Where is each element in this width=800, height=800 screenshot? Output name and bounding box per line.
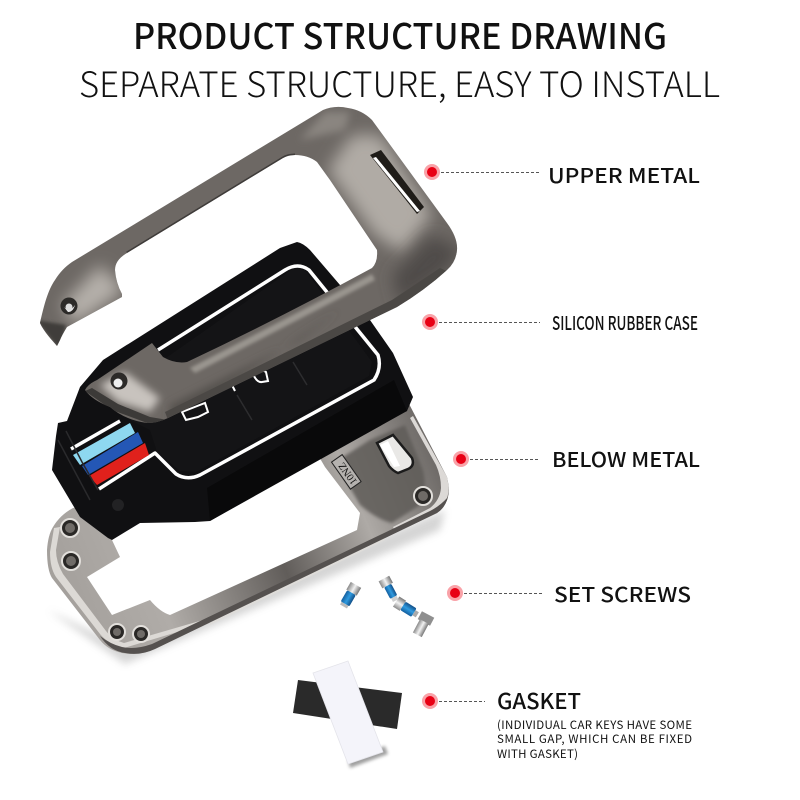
light rail highlights [393, 416, 448, 531]
screw 2 [379, 576, 401, 603]
callout: below metal: BELOW METAL [552, 443, 700, 473]
silicon rubber case [52, 242, 413, 540]
dark outer rim [100, 497, 448, 654]
white trim loop [99, 266, 379, 489]
gasket note: (INDIVIDUAL CAR KEYS HAVE SOME [497, 717, 692, 733]
lower metal frame [47, 400, 449, 664]
metal sheen [62, 265, 125, 325]
frame screw holes [61, 487, 432, 642]
callout: set screws [447, 578, 691, 608]
callout: gasket: GASKET [497, 684, 581, 716]
button separators [237, 362, 307, 420]
callout: gasket [422, 684, 692, 762]
screw 4 [411, 611, 434, 638]
callout: silicon rubber case: SILICON RUBBER CASE [552, 309, 698, 336]
engraved marking [332, 455, 361, 489]
title: PRODUCT STRUCTURE DRAWING [133, 9, 667, 60]
gasket note: WITH GASKET) [497, 746, 578, 762]
set screws [338, 576, 434, 638]
colored stripes [73, 423, 149, 485]
callout: upper metal [424, 159, 700, 189]
key button symbols [182, 370, 268, 420]
gasket note [497, 717, 692, 762]
lower flap [207, 380, 407, 521]
upper metal cover [30, 100, 465, 430]
callout: set screws: SET SCREWS [554, 578, 691, 608]
metal tab [377, 435, 413, 473]
button area [130, 268, 372, 472]
rubber ribs [58, 431, 98, 500]
dark inner floor of frame [335, 425, 425, 523]
subtitle: SEPARATE STRUCTURE, EASY TO INSTALL [79, 57, 720, 108]
end slot [370, 150, 424, 214]
screw 3 [393, 596, 421, 620]
callout: upper metal: UPPER METAL [548, 159, 700, 189]
engraved marking: 10NZ [337, 460, 360, 486]
gasket note: SMALL GAP, WHICH CAN BE FIXED [497, 731, 692, 747]
callout: below metal [453, 443, 700, 473]
screw 1 [338, 582, 361, 610]
foam strip [293, 680, 402, 729]
gasket [293, 661, 402, 768]
cover screw holes [60, 298, 78, 314]
callout: silicon rubber case [422, 309, 698, 336]
white backing strip [313, 661, 383, 764]
